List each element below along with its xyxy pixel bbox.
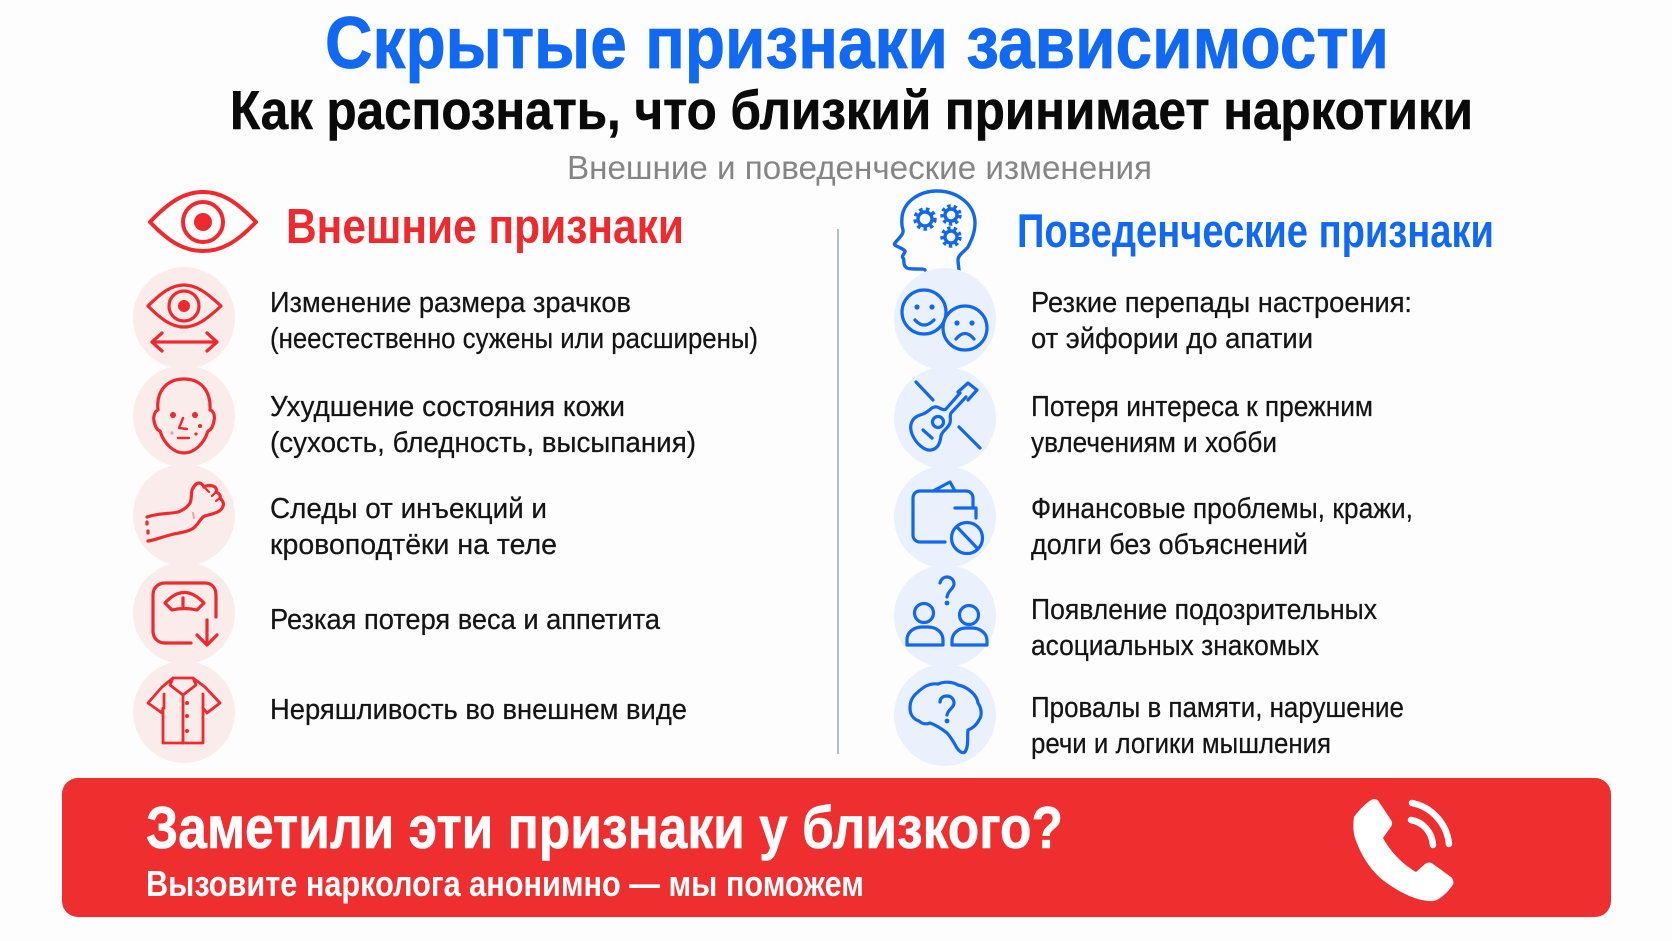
item: suspicious acquaintances	[894, 565, 1377, 667]
item: injection marks: Следы от инъекций и	[270, 493, 547, 525]
item: money problems: долги без объяснений	[1031, 529, 1308, 561]
item: memory lapses: речи и логики мышления	[1031, 728, 1331, 760]
icon: phone	[1353, 799, 1453, 901]
panel: behavioural signs	[894, 191, 1494, 766]
tagline: Внешние и поведенческие изменения	[567, 149, 1152, 186]
item: money problems: Финансовые проблемы, кражи,	[1031, 493, 1413, 525]
banner subheading: Вызовите нарколога анонимно — мы поможем	[146, 863, 864, 904]
heading: behavioural signs: Поведенческие признаки	[1017, 204, 1494, 257]
item: pupils: Изменение размера зрачков	[270, 287, 631, 319]
banner heading: Заметили эти признаки у близкого?	[146, 795, 1063, 861]
title: Скрытые признаки зависимости	[325, 3, 1389, 84]
item: mood swings: от эйфории до апатии	[1031, 323, 1313, 355]
item: memory lapses: Провалы в памяти, нарушение	[1031, 692, 1404, 724]
item: money problems	[894, 466, 1413, 568]
item: memory lapses	[894, 664, 1404, 766]
item: lost interests: Потеря интереса к прежним	[1031, 391, 1373, 423]
item: weight loss	[133, 562, 661, 664]
item: injection marks	[133, 464, 557, 566]
item: injection marks: кровоподтёки на теле	[270, 529, 557, 561]
item: suspicious acquaintances: асоциальных знакомых	[1031, 630, 1319, 662]
item: skin	[133, 365, 696, 467]
panel: call to action banner	[62, 778, 1611, 917]
item: untidy look: Неряшливость во внешнем виде	[270, 694, 687, 726]
icon: large eye	[150, 192, 256, 251]
item: lost interests: увлечениям и хобби	[1031, 427, 1277, 459]
item: untidy look	[133, 661, 687, 763]
item: pupils	[133, 267, 758, 369]
item: lost interests	[894, 367, 1373, 469]
item: mood swings	[894, 268, 1412, 370]
item: suspicious acquaintances: Появление подозрительных	[1031, 594, 1377, 626]
panel: external signs	[133, 192, 758, 763]
item: skin: Ухудшение состояния кожи	[270, 391, 625, 423]
icon: head with gears	[894, 191, 975, 271]
item: weight loss: Резкая потеря веса и аппетита	[270, 604, 661, 636]
heading: external signs: Внешние признаки	[286, 200, 684, 254]
item: mood swings: Резкие перепады настроения:	[1031, 287, 1412, 319]
subtitle: Как распознать, что близкий принимает наркотики	[230, 79, 1473, 141]
item: pupils: (неестественно сужены или расширены)	[270, 323, 758, 355]
item: skin: (сухость, бледность, высыпания)	[270, 427, 696, 459]
